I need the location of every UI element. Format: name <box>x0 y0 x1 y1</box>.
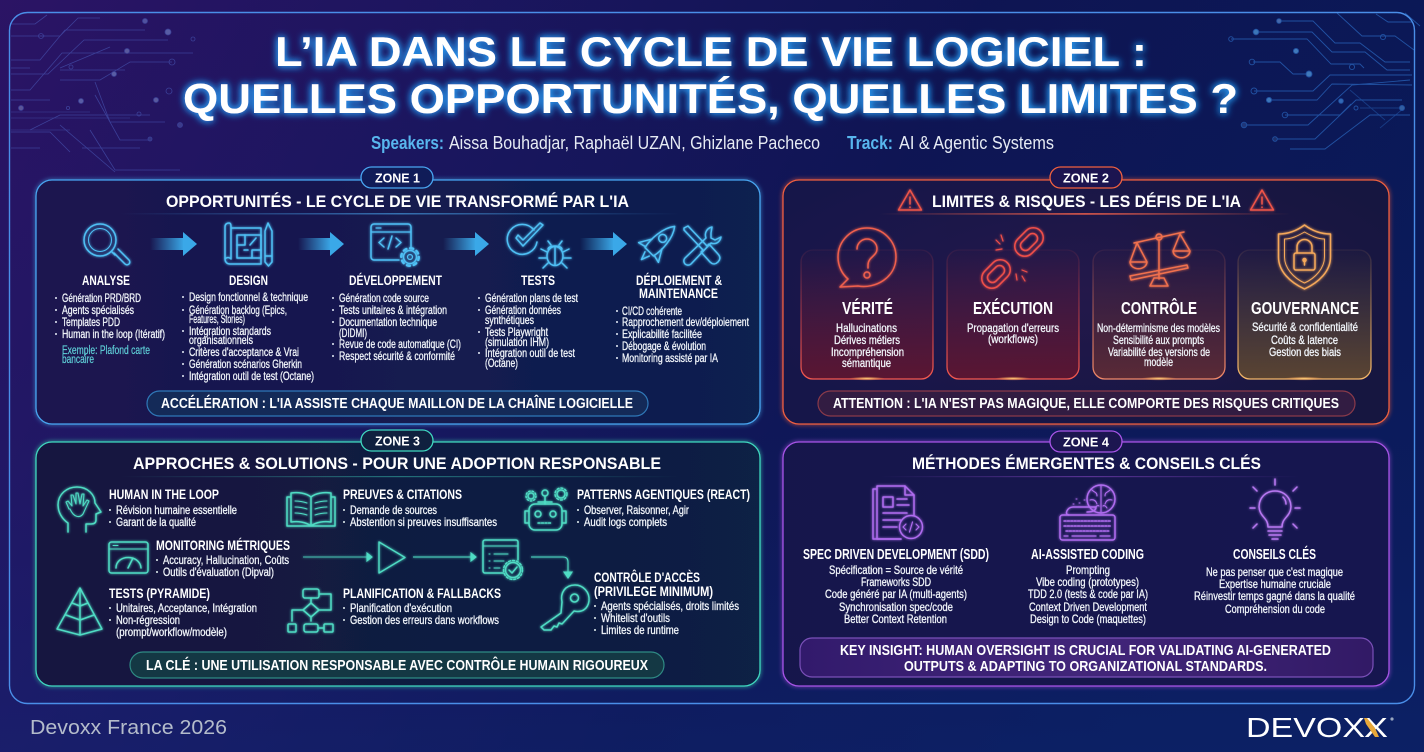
column: conseils clés <box>1194 479 1355 616</box>
step: tests: Génération données <box>485 304 561 317</box>
item: planification et fallbacks: PLANIFICATION & FALLBACKS <box>343 586 501 601</box>
zone 3 badge <box>361 430 433 451</box>
callout: key insight: OUTPUTS & ADAPTING TO ORGANIZATIONAL STANDARDS. <box>904 658 1267 675</box>
card: gouvernance: Coûts & latence <box>1271 334 1338 347</box>
step: tests: Intégration outil de test <box>485 347 576 360</box>
step: tests: synthétiques <box>485 314 534 327</box>
column: spec driven development: Better Context Retention <box>844 613 947 626</box>
arrow 2 <box>298 232 344 256</box>
step: design: DESIGN <box>229 273 268 288</box>
step: design: Critères d'acceptance & Vrai <box>189 346 299 359</box>
panel: zone 2 limites et risques <box>783 167 1389 424</box>
subtitle: speakers and track: Speakers: <box>371 133 444 153</box>
step: analyse: Agents spécialisés <box>62 304 134 317</box>
icon: light bulb <box>1250 479 1300 539</box>
icon: question bubble <box>838 228 896 287</box>
arrow: coude vers clé <box>531 557 572 578</box>
item: tests pyramide <box>57 586 257 639</box>
circuit decoration left <box>11 15 195 172</box>
step: développement: Tests unitaires & intégration <box>339 304 447 317</box>
item: human in the loop: HUMAN IN THE LOOP <box>109 487 219 502</box>
column: ai-assisted coding: Prompting <box>1066 564 1110 577</box>
title: L’IA DANS LE CYCLE DE VIE LOGICIEL : <box>275 28 1147 75</box>
step: tests: Génération plans de test <box>485 292 579 305</box>
step: design: Design fonctionnel & technique <box>189 291 308 304</box>
step: design: Génération backlog (Epics, <box>189 304 287 317</box>
column: spec driven development <box>803 486 989 626</box>
zone 4 badge: ZONE 4 <box>1063 434 1110 450</box>
card: gouvernance: GOUVERNANCE <box>1251 298 1359 318</box>
card: gouvernance: Gestion des biais <box>1269 346 1341 359</box>
column: ai-assisted coding: AI-ASSISTED CODING <box>1031 547 1144 563</box>
subtitle: speakers and track: Aissa Bouhadjar, Raphaël UZAN, Ghizlane Pacheco <box>449 133 820 153</box>
subtitle: speakers and track: AI & Agentic Systems <box>899 133 1054 153</box>
item: patterns agentiques: Audit logs complets <box>584 516 667 529</box>
arrow: vers checklist <box>413 553 476 561</box>
card: exécution <box>947 224 1079 380</box>
column: spec driven development: SPEC DRIVEN DEVELOPMENT (SDD) <box>803 547 989 563</box>
step: design: Intégration outil de test (Octane) <box>189 370 314 383</box>
callout: attention: ATTENTION : L'IA N'EST PAS MAGIQUE, ELLE COMPORTE DES RISQUES CRITIQUES <box>833 396 1339 412</box>
step: tests: (simulation IHM) <box>485 336 549 349</box>
panel: zone 1 opportunités <box>36 167 760 424</box>
item: planification et fallbacks <box>288 586 501 632</box>
callout: la clé: LA CLÉ : UNE UTILISATION RESPONSABLE AVEC CONTRÔLE HUMAIN RIGOUREUX <box>146 656 648 674</box>
callout: key insight: KEY INSIGHT: HUMAN OVERSIGHT IS CRUCIAL FOR VALIDATING AI-GENERATED <box>840 642 1331 659</box>
zone 3 frame <box>36 442 760 686</box>
step: analyse: ANALYSE <box>82 273 130 288</box>
item: human in the loop: Révision humaine essentielle <box>116 504 237 517</box>
icon: document with code <box>873 486 922 539</box>
item: planification et fallbacks: Planification d'exécution <box>350 602 452 615</box>
column: ai-assisted coding: TDD 2.0 (tests & code par IA) <box>1028 588 1148 601</box>
item: patterns agentiques: Observer, Raisonner, Agir <box>584 504 689 517</box>
card: gouvernance: Sécurité & confidentialité <box>1252 321 1358 334</box>
icon: rocket and tools <box>632 216 721 269</box>
logo: devoxx: DEVOX <box>1246 712 1365 743</box>
card: contrôle: Non-déterminisme des modèles <box>1097 322 1220 335</box>
item: contrôle d'accès: Whitelist d'outils <box>601 612 670 625</box>
card: exécution: EXÉCUTION <box>973 297 1053 318</box>
item: contrôle d'accès <box>541 570 739 637</box>
column: conseils clés: Ne pas penser que c'est magique <box>1206 566 1343 579</box>
step: déploiement et maintenance: Débogage & évolution <box>622 340 706 353</box>
step: déploiement et maintenance: Monitoring assisté par IA <box>622 352 718 365</box>
item: monitoring métriques <box>109 538 290 579</box>
icon: balance <box>1130 232 1190 286</box>
callout: la clé <box>130 652 664 678</box>
step: déploiement et maintenance: Explicabilité facilitée <box>622 328 702 341</box>
card: contrôle <box>1093 232 1225 380</box>
zone 3 heading: APPROCHES & SOLUTIONS - POUR UNE ADOPTION RESPONSABLE <box>133 454 661 473</box>
step: déploiement et maintenance: DÉPLOIEMENT & <box>636 273 722 288</box>
item: preuves et citations: Demande de sources <box>350 504 437 517</box>
icon: warning right <box>1250 190 1274 210</box>
step: tests: (Octane) <box>485 357 518 370</box>
callout: key insight <box>800 638 1373 677</box>
step: développement: Génération code source <box>339 292 429 305</box>
icon: gauge window <box>109 542 148 573</box>
icon: code window with gear <box>371 224 419 266</box>
item: contrôle d'accès: (PRIVILEGE MINIMUM) <box>594 584 713 599</box>
column: spec driven development: Synchronisation spec/code <box>839 601 953 614</box>
zone 4 heading: MÉTHODES ÉMERGENTES & CONSEILS CLÉS <box>912 454 1261 473</box>
item: monitoring métriques: MONITORING MÉTRIQUES <box>156 538 290 553</box>
item: contrôle d'accès: Limites de runtime <box>601 624 679 637</box>
column: spec driven development: Spécification = Source de vérité <box>829 564 963 577</box>
item: patterns agentiques: PATTERNS AGENTIQUES (REACT) <box>577 487 750 502</box>
card: exécution: Propagation d'erreurs <box>967 322 1059 335</box>
callout: accélération <box>147 391 648 416</box>
zone 1 badge <box>361 167 433 188</box>
column: conseils clés: CONSEILS CLÉS <box>1233 546 1316 563</box>
step: développement: Respect sécurité & conformité <box>339 350 455 363</box>
step: déploiement et maintenance: Rapprochement dev/déploiement <box>622 316 750 329</box>
card: contrôle: modèle <box>1144 356 1173 369</box>
item: tests pyramide: TESTS (PYRAMIDE) <box>109 586 210 601</box>
subtitle: speakers and track: Track: <box>847 133 893 153</box>
item: monitoring métriques: Accuracy, Hallucination, Coûts <box>163 554 289 567</box>
arrow 4 <box>580 232 627 256</box>
zone 3 badge: ZONE 3 <box>375 434 420 448</box>
card: vérité: VÉRITÉ <box>842 297 893 318</box>
icon: broken chain <box>978 224 1047 292</box>
item: contrôle d'accès: Agents spécialisés, droits limités <box>601 600 739 613</box>
title <box>183 28 1238 122</box>
step: développement: (DIDMI) <box>339 327 367 340</box>
column: spec driven development: Frameworks SDD <box>861 576 931 589</box>
card: vérité <box>801 228 933 380</box>
zone 4 badge <box>1050 431 1122 452</box>
card: vérité: Hallucinations <box>836 322 897 335</box>
column: conseils clés: Réinvestir temps gagné dans la qualité <box>1194 590 1355 603</box>
column: conseils clés: Compréhension du code <box>1225 603 1325 616</box>
column: ai-assisted coding: Vibe coding (prototypes) <box>1036 576 1139 589</box>
zone 2 frame <box>783 180 1389 424</box>
step: tests: Tests Playwright <box>485 326 549 339</box>
zone 1 badge: ZONE 1 <box>375 170 420 186</box>
footer event name: Devoxx France 2026 <box>30 717 227 739</box>
item: preuves et citations: Abstention si preuves insuffisantes <box>350 516 497 529</box>
step: analyse: Templates PDD <box>62 316 120 329</box>
item: human in the loop <box>58 487 237 532</box>
icon: magnifier <box>84 224 130 265</box>
icon: keyboard and brain <box>1060 485 1115 540</box>
step: analyse: Exemple: Plafond carte <box>62 345 150 357</box>
column: conseils clés: Expertise humaine cruciale <box>1219 578 1331 591</box>
card: exécution: (workflows) <box>988 333 1038 346</box>
item: preuves et citations <box>287 487 497 529</box>
step: design: Intégration standards <box>189 325 271 338</box>
zone 2 badge <box>1050 167 1122 188</box>
icon: robot <box>525 488 567 530</box>
callout: accélération: ACCÉLÉRATION : L'IA ASSISTE CHAQUE MAILLON DE LA CHAÎNE LOGICIELLE <box>161 394 633 412</box>
step: développement: Revue de code automatique (CI) <box>339 338 461 351</box>
item: human in the loop: Garant de la qualité <box>116 516 196 529</box>
subtitle: speakers and track <box>371 133 1054 153</box>
column: spec driven development: Code généré par IA (multi-agents) <box>825 588 967 601</box>
step: analyse: bancaire <box>62 354 94 366</box>
icon: open book <box>287 493 335 526</box>
step: déploiement et maintenance <box>616 273 750 365</box>
step: design <box>182 273 314 383</box>
step: tests: TESTS <box>521 273 555 288</box>
column: ai-assisted coding <box>1028 485 1148 626</box>
icon: checklist <box>483 540 522 580</box>
step: design: organisationnels <box>189 334 253 347</box>
step: analyse: Human in the loop (Itératif) <box>62 328 165 341</box>
zone 2 heading: LIMITES & RISQUES - LES DÉFIS DE L'IA <box>932 192 1241 211</box>
panel: zone 3 approches et solutions <box>36 430 760 686</box>
zone 4 frame <box>783 442 1389 686</box>
step: développement: Documentation technique <box>339 316 437 329</box>
item: planification et fallbacks: Gestion des erreurs dans workflows <box>350 614 499 627</box>
icon: check and bug <box>507 223 571 268</box>
step: déploiement et maintenance: CI/CD cohérente <box>622 305 682 318</box>
icon: blueprint <box>225 223 272 266</box>
card: contrôle: Variabilité des versions de <box>1108 346 1210 359</box>
icon: shield lock <box>1278 225 1330 289</box>
item: patterns agentiques <box>525 487 750 530</box>
step: design: Génération scénarios Gherkin <box>189 358 302 371</box>
icon: pyramid <box>57 588 102 635</box>
card: contrôle: Sensibilité aux prompts <box>1113 334 1204 347</box>
arrow 1 <box>150 232 197 256</box>
step: développement: DÉVELOPPEMENT <box>349 273 443 288</box>
item: tests pyramide: Non-régression <box>116 614 180 627</box>
card: vérité: sémantique <box>842 357 891 370</box>
item: preuves et citations: PREUVES & CITATIONS <box>343 487 462 502</box>
arrow: vers triangle <box>303 553 372 561</box>
icon: play triangle <box>379 542 405 573</box>
card: vérité: Incompréhension <box>831 346 904 359</box>
logo: devoxx <box>1246 712 1394 743</box>
panel: zone 4 méthodes émergentes <box>783 431 1389 686</box>
step: déploiement et maintenance: MAINTENANCE <box>639 286 718 301</box>
step: design: Features, Stories) <box>189 313 245 326</box>
card: contrôle: CONTRÔLE <box>1121 297 1197 318</box>
title: QUELLES OPPORTUNITÉS, QUELLES LIMITES ? <box>183 75 1238 122</box>
icon: head with hand <box>58 487 101 532</box>
card: gouvernance <box>1238 225 1371 380</box>
icon: flowchart <box>288 589 333 632</box>
logo: devoxx: X <box>1364 712 1388 743</box>
item: tests pyramide: (prompt/workflow/modèle) <box>116 626 227 639</box>
step: développement <box>332 273 461 363</box>
circuit decoration right <box>1229 13 1420 149</box>
callout: attention <box>818 391 1355 416</box>
zone 1 frame <box>36 180 760 424</box>
column: ai-assisted coding: Context Driven Development <box>1029 601 1148 614</box>
step: tests <box>478 273 579 370</box>
arrow 3 <box>443 232 489 256</box>
icon: warning left <box>898 190 922 210</box>
card: vérité: Dérives métiers <box>834 334 900 347</box>
item: tests pyramide: Unitaires, Acceptance, Intégration <box>116 602 257 615</box>
column: ai-assisted coding: Design to Code (maquettes) <box>1030 613 1146 626</box>
step: analyse <box>55 273 165 366</box>
step: analyse: Génération PRD/BRD <box>62 292 141 305</box>
zone 2 badge: ZONE 2 <box>1063 170 1109 186</box>
item: monitoring métriques: Outils d'évaluation (Dipval) <box>163 566 274 579</box>
zone 1 heading: OPPORTUNITÉS - LE CYCLE DE VIE TRANSFORMÉ PAR L'IA <box>166 192 629 211</box>
item: contrôle d'accès: CONTRÔLE D'ACCÈS <box>594 570 700 585</box>
icon: key <box>541 585 589 630</box>
